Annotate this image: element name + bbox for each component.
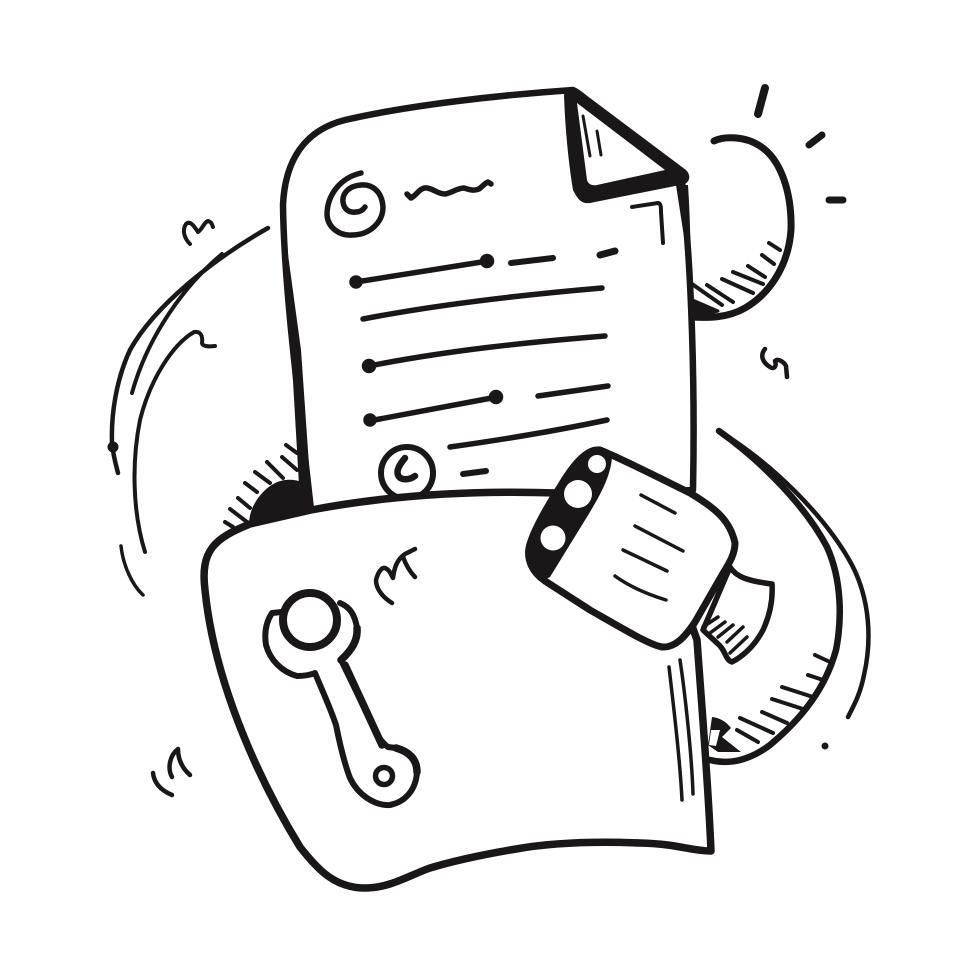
small squiggle marks xyxy=(153,221,787,795)
panel: folder xyxy=(204,492,711,888)
icon: dark semicircle behind folder xyxy=(225,445,311,527)
left edge thickening xyxy=(284,225,312,508)
icon: spiral seal xyxy=(327,173,383,235)
icon: fold hatches and corner mark xyxy=(583,116,663,243)
icon: fold inner highlight xyxy=(577,103,665,185)
stamp body xyxy=(529,450,735,647)
icon: clock seal xyxy=(381,447,433,499)
panel: document page xyxy=(283,87,694,510)
stamp band holes xyxy=(588,455,606,473)
icon: folded corner xyxy=(564,87,689,203)
folder edge lines xyxy=(669,660,693,800)
icon: large arcs bottom right xyxy=(708,431,868,762)
squiggle heading xyxy=(407,182,491,198)
stamp handle xyxy=(703,567,772,662)
text lines xyxy=(352,251,615,474)
decorative arcs left xyxy=(108,228,268,595)
icon: wrench xyxy=(265,593,417,805)
stamp lines xyxy=(615,495,683,600)
icon: half circle behind document xyxy=(688,138,791,318)
squiggle mark xyxy=(376,549,415,603)
icon: stamp xyxy=(528,448,772,662)
stamp black band xyxy=(528,448,612,580)
icon: rays xyxy=(758,88,843,200)
right edge thickening xyxy=(676,185,691,300)
